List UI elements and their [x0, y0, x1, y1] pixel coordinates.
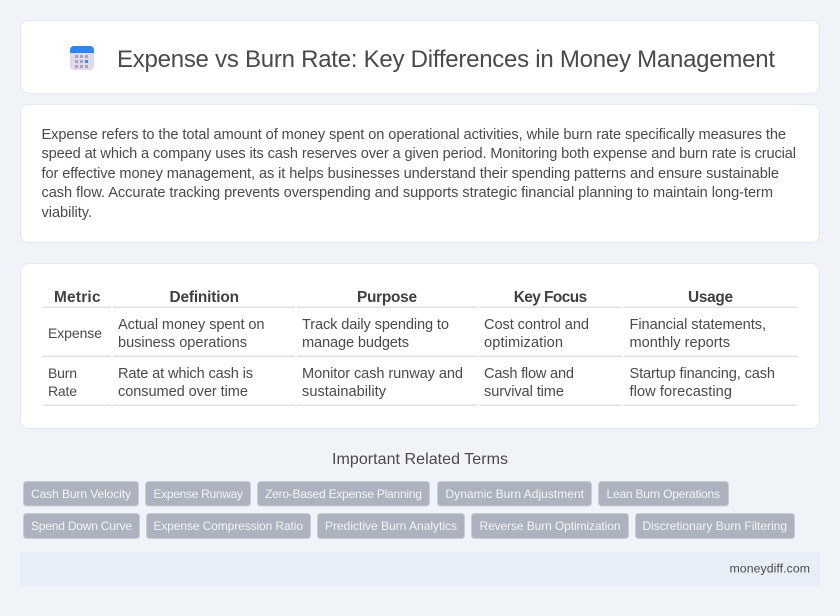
table row: Expense: monthly reports	[630, 335, 730, 351]
table row: Expense: optimization	[484, 335, 563, 351]
panel: summary paragraph: cash flow. Accurate tracking prevents overspending and supports strategic financial planning to maintain long-term	[42, 185, 773, 201]
table row: Burn Rate: Cash flow and	[484, 366, 574, 382]
tag	[146, 482, 250, 506]
icon: calendar	[70, 46, 94, 70]
tag	[24, 514, 140, 538]
table row: Expense: manage budgets	[302, 335, 409, 351]
table row: Expense	[48, 317, 766, 351]
table row: Burn Rate	[48, 365, 775, 400]
tag	[438, 482, 592, 506]
table row: Expense: Expense	[48, 325, 102, 341]
table row: Expense: business operations	[118, 335, 247, 351]
table row: Burn Rate: consumed over time	[118, 384, 248, 400]
tag: Lean Burn Operations	[606, 487, 720, 501]
tag	[318, 514, 464, 538]
table row: Burn Rate: sustainability	[302, 384, 387, 400]
table row: Burn Rate: Rate at which cash is	[118, 366, 253, 382]
footer: moneydiff.com	[730, 562, 810, 576]
table row: Burn Rate: flow forecasting	[630, 384, 732, 400]
title: Expense vs Burn Rate: Key Differences in Money Management	[117, 46, 775, 73]
table header row	[54, 289, 733, 306]
tag	[24, 482, 138, 506]
table row: Expense: Financial statements,	[630, 317, 766, 333]
tag: Zero-Based Expense Planning	[265, 487, 422, 501]
panel: header	[20, 20, 820, 94]
panel: comparison table	[20, 264, 820, 428]
panel: summary paragraph: speed at which a company uses its cash reserves over a given period. Monitoring both expense and burn rate is crucial	[42, 146, 796, 162]
table row: Burn Rate: survival time	[484, 384, 564, 400]
tag	[636, 514, 794, 538]
tag list: related terms	[24, 482, 794, 538]
table row: Burn Rate: Startup financing, cash	[630, 366, 775, 382]
panel: summary paragraph: for effective money management, as it helps businesses understand their spending patterns and ensure sustainable	[42, 166, 779, 182]
tag	[146, 514, 310, 538]
table row: Burn Rate: Burn	[48, 365, 77, 381]
tag: Spend Down Curve	[31, 519, 132, 533]
table header row: Metric	[54, 289, 101, 306]
tag: Discretionary Burn Filtering	[642, 519, 787, 533]
tag: Expense Runway	[154, 487, 243, 501]
table header row: Usage	[688, 289, 733, 306]
heading: related terms: Important Related Terms	[332, 451, 508, 468]
tag	[258, 482, 430, 506]
table row: Expense: Actual money spent on	[118, 317, 264, 333]
tag: Dynamic Burn Adjustment	[446, 487, 585, 501]
tag	[472, 514, 628, 538]
table row: Burn Rate: Rate	[48, 383, 77, 399]
panel: summary paragraph: viability.	[42, 205, 92, 221]
table header row: Key Focus	[514, 289, 587, 306]
tag: Cash Burn Velocity	[31, 487, 131, 501]
tag	[598, 482, 728, 506]
table row: Expense: Track daily spending to	[302, 317, 449, 333]
panel: summary paragraph	[20, 104, 820, 242]
tag: Expense Compression Ratio	[154, 519, 303, 533]
table header row: Definition	[170, 289, 239, 306]
table row: Expense: Cost control and	[484, 317, 589, 333]
footer	[20, 552, 820, 586]
tag: Predictive Burn Analytics	[325, 519, 457, 533]
panel: summary paragraph: Expense refers to the total amount of money spent on operational activities, while burn rate specifically measures the	[42, 127, 786, 143]
table header row: Purpose	[357, 289, 417, 306]
tag: Reverse Burn Optimization	[480, 519, 620, 533]
table row: Burn Rate: Monitor cash runway and	[302, 366, 463, 382]
